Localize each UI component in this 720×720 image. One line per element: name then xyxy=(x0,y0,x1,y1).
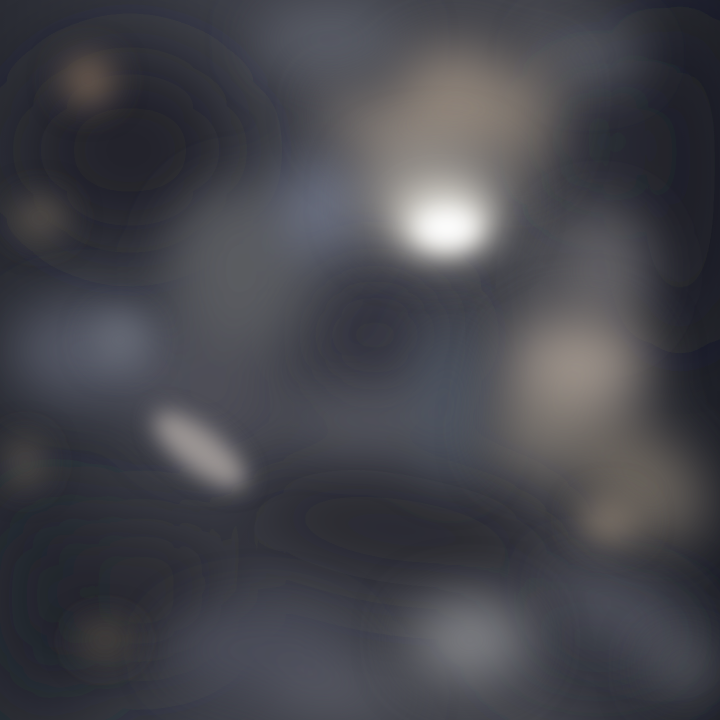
icon: diagonal light streak xyxy=(143,399,257,501)
icon: central light burst xyxy=(365,150,505,254)
warm glows xyxy=(314,47,720,690)
small warm spots xyxy=(5,54,640,660)
